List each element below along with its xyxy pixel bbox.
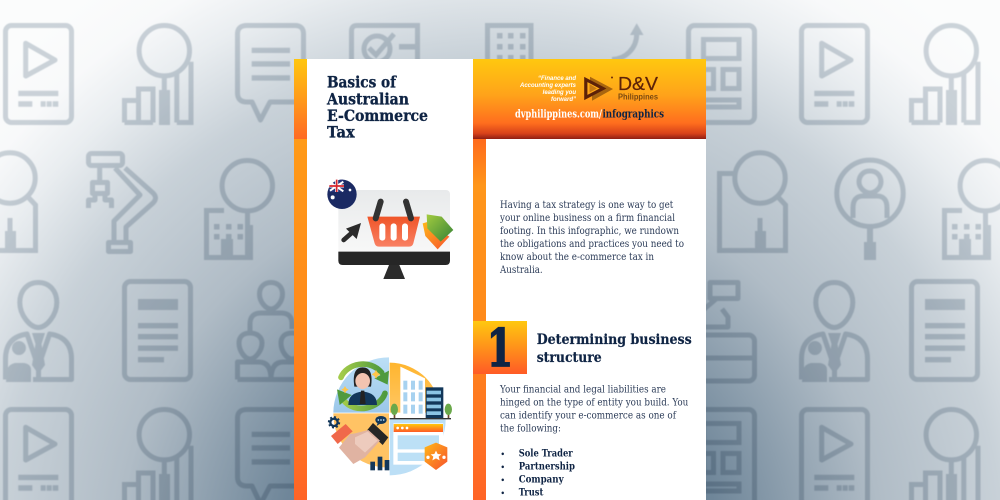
title: Basics of	[327, 72, 397, 91]
icon: audience	[238, 282, 305, 380]
intro text block: Australia.	[499, 264, 543, 276]
bullet list: •	[500, 489, 505, 498]
panel: orange header	[473, 59, 706, 139]
heading: determining business structure: structure	[537, 350, 602, 366]
bullet list: Partnership	[519, 461, 575, 473]
bullet list: Sole Trader	[519, 448, 573, 460]
icon: magnifier and bars lower	[124, 410, 191, 500]
icon: businessperson	[6, 282, 72, 382]
icon: robot arm	[88, 154, 156, 252]
icon: magnifier and bars	[124, 26, 191, 125]
icon: layout document lower	[688, 410, 754, 500]
logo: D&V Philippines: D&V	[618, 73, 659, 94]
title: Tax	[327, 123, 355, 142]
tagline: Accounting experts	[519, 83, 577, 89]
number badge 1	[473, 319, 527, 379]
icon: office building	[488, 26, 531, 83]
body text block: can identify your e-commerce as one of	[500, 409, 677, 421]
panel: left sidebar	[294, 59, 307, 500]
intro text block: footing. In this infographic, we rundown	[500, 225, 679, 237]
icon: hand holding	[688, 282, 754, 381]
tagline: leading you	[543, 90, 576, 96]
title	[326, 72, 428, 142]
title: E-Commerce	[327, 106, 428, 125]
icon: play document right	[802, 26, 868, 122]
website link: infographics	[602, 108, 664, 121]
bullet list: Company	[519, 474, 564, 486]
bullet list	[500, 448, 575, 499]
bullet list: Trust	[519, 487, 544, 499]
icon: play document	[6, 26, 72, 122]
number badge 1: 1	[487, 319, 513, 379]
bullet list: •	[500, 476, 505, 485]
body text block: Your financial and legal liabilities are	[499, 383, 666, 395]
icon: magnifier and building right	[944, 160, 1000, 260]
body text block	[499, 383, 688, 434]
panel: infographic sheet	[294, 59, 706, 500]
heading: determining business structure: Determining business	[537, 332, 692, 348]
icon: play document lower	[6, 410, 72, 500]
icon: businessperson right	[802, 282, 868, 382]
logo: D&V Philippines: Philippines	[618, 92, 659, 101]
intro text block	[499, 199, 684, 276]
intro text block: your online business on a firm financial	[499, 212, 676, 224]
tagline: “Finance and	[538, 76, 576, 82]
icon: magnifier and document right	[720, 153, 786, 253]
intro text block: the obligations and practices you need to	[500, 238, 684, 250]
tagline: forward”	[551, 97, 576, 103]
intro text block: know about the e-commerce tax in	[500, 251, 654, 263]
icon: magnifier and building	[206, 160, 272, 260]
intro text block: Having a tax strategy is one way to get	[500, 199, 674, 211]
icon: magnifier and bars right	[912, 26, 978, 125]
icon: text document	[124, 282, 190, 380]
icon: magnifier and document left	[0, 153, 36, 253]
tagline	[519, 76, 577, 103]
website link: dvphilippines.com/	[515, 108, 603, 121]
icon: play document lower right	[802, 410, 868, 500]
icon: person in magnifier	[837, 160, 903, 260]
icon: text document right	[912, 282, 978, 380]
panel: left white column	[307, 59, 473, 500]
icon: checklist	[352, 26, 418, 83]
panel: centre strip	[473, 139, 486, 500]
icon: magnifier and bars lower right	[912, 410, 978, 500]
icon: layout document	[688, 26, 754, 122]
bullet list: •	[500, 450, 505, 459]
icon: speech bubble	[238, 26, 304, 120]
icon: growth arrow	[612, 23, 644, 60]
bullet list: •	[500, 463, 505, 472]
logo: D&V Philippines	[586, 73, 659, 101]
icon: online shop monitor with Australian flag	[327, 180, 453, 279]
icon: business structure illustration	[329, 357, 452, 475]
icon: speech bubble lower	[238, 410, 304, 500]
body text block: hinged on the type of entity you build. You	[500, 396, 688, 408]
panel: right white column	[486, 139, 706, 500]
title: Australian	[326, 89, 409, 108]
body text block: the following:	[500, 422, 561, 434]
heading: determining business structure	[537, 332, 692, 366]
